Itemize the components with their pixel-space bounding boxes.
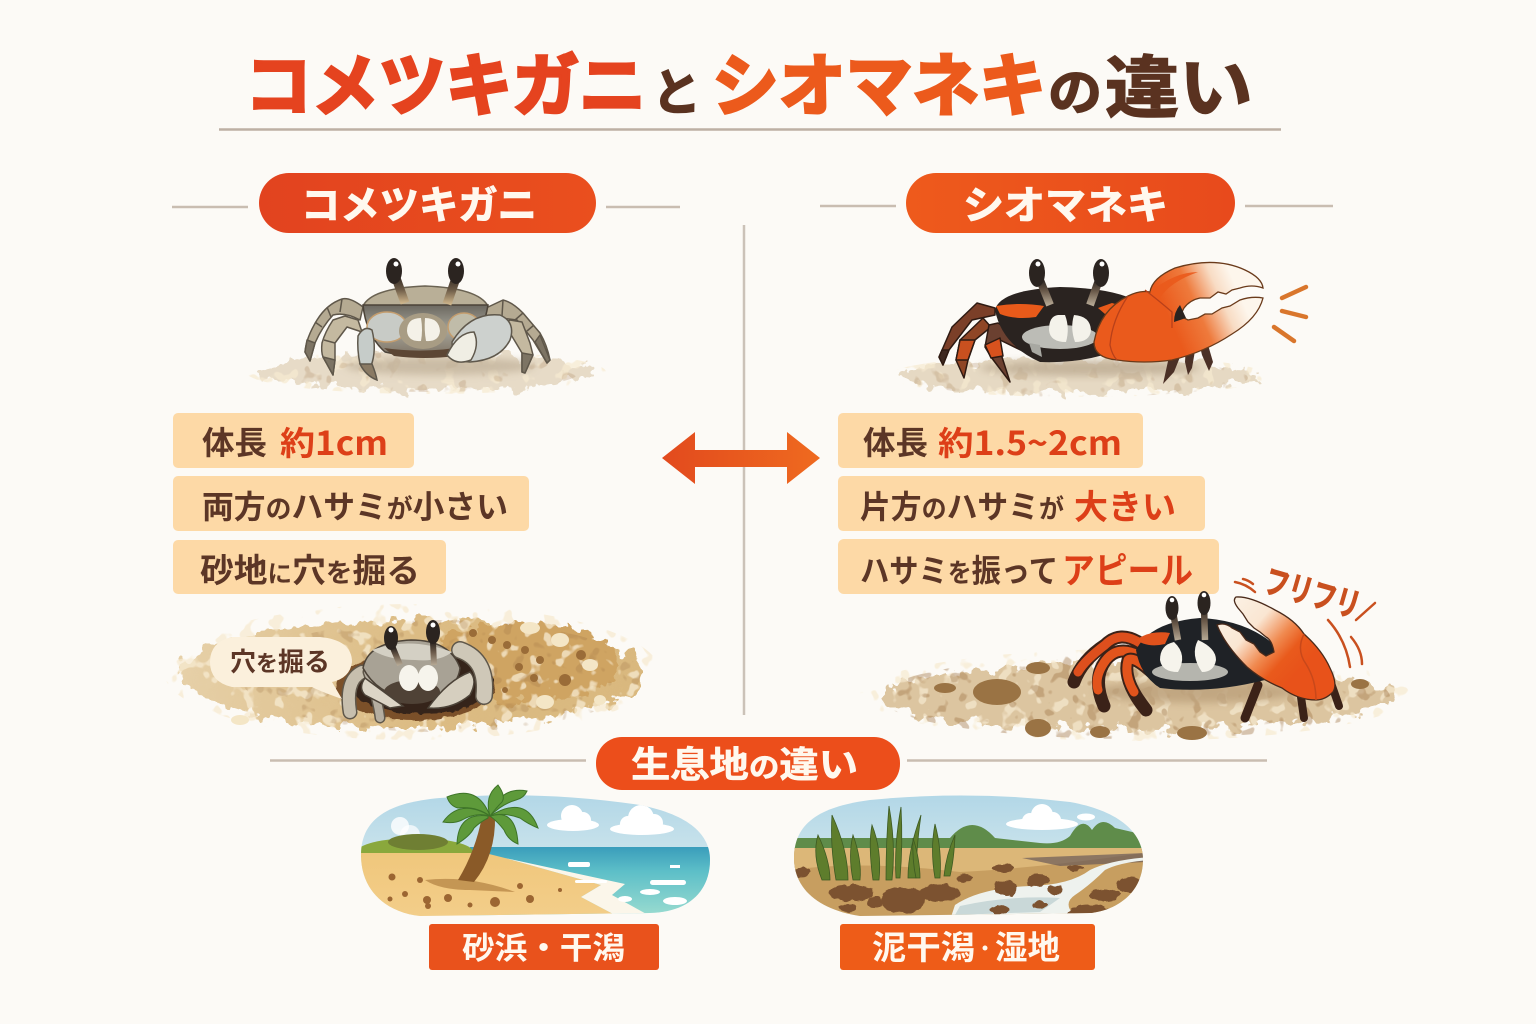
- water: [952, 858, 1143, 915]
- title: [245, 49, 1253, 127]
- label: 泥干潟・湿地: 湿地: [995, 929, 1060, 966]
- info box: waves claw: アピール: [1062, 550, 1193, 591]
- info box: one claw large: [838, 476, 1205, 531]
- info box: both claws small: [173, 476, 529, 531]
- info box: waves claw: ハサミを振って: [860, 553, 1058, 589]
- palm tree: [443, 785, 538, 882]
- text: フリフリ: フリフリ: [1260, 562, 1364, 625]
- eyes: [1166, 591, 1210, 640]
- eye stalks: [386, 258, 464, 304]
- left legs: [939, 303, 1036, 382]
- info box: body length right: 体長: [863, 425, 928, 461]
- carapace: [363, 286, 488, 306]
- info box: body length right: [838, 413, 1143, 468]
- motion lines: [1274, 287, 1306, 341]
- legs: [1074, 637, 1339, 718]
- crab: シオマネキ (orange claw): [939, 259, 1306, 384]
- info box: one claw large: 大きい: [1074, 489, 1176, 527]
- title: の: [1048, 65, 1102, 121]
- mouth: [399, 665, 438, 691]
- info box: body length left: 体長: [202, 425, 267, 461]
- label: 砂浜・干潟: 砂浜・干潟: [462, 931, 625, 966]
- motion lines: waving: [1235, 579, 1375, 667]
- landscape: mud flat and wetland: [794, 796, 1143, 916]
- title: コメツキガニ: [245, 49, 646, 125]
- small claws: [358, 315, 512, 380]
- title: と: [652, 65, 701, 121]
- eyes: [384, 620, 440, 665]
- title: シオマネキ: [712, 49, 1046, 125]
- speech bubble: 穴を掘る: [210, 637, 352, 699]
- infographic canvas: [166, 50, 1408, 970]
- heading pill: コメツキガニ: コメツキガニ: [301, 185, 537, 228]
- big claw: [1094, 262, 1263, 362]
- mouth: [1160, 640, 1216, 672]
- mud lumps: [795, 863, 1140, 914]
- info box: digs holes: [173, 540, 446, 594]
- label: 泥干潟・湿地: [840, 924, 1095, 970]
- heading pill: コメツキガニ: [259, 173, 596, 233]
- info box: one claw large: 片方のハサミが: [860, 489, 1064, 525]
- mouth: [399, 313, 447, 349]
- title: 違い: [1105, 51, 1253, 127]
- back legs: [1163, 338, 1213, 384]
- double-headed arrow: [662, 432, 820, 484]
- ground with burrow: [164, 604, 660, 740]
- label: 泥干潟・湿地: 泥干潟: [872, 929, 975, 966]
- heading pill: シオマネキ: [906, 173, 1235, 233]
- info box: body length left: 約1cm: [280, 417, 388, 465]
- info box: body length left: [173, 413, 414, 468]
- carapace: [995, 287, 1135, 362]
- heading pill: シオマネキ: シオマネキ: [963, 185, 1168, 228]
- info box: both claws small: 両方のハサミが小さい: [202, 489, 508, 525]
- raised claw: [1217, 597, 1335, 700]
- mouth: [1049, 315, 1068, 342]
- speech bubble: 穴を掘る: 穴を掘る: [230, 647, 330, 677]
- left legs: [305, 299, 363, 375]
- right legs: [486, 300, 550, 373]
- info box: digs holes: 砂地に穴を掘る: [200, 552, 420, 589]
- landscape: sandy beach: [355, 785, 715, 920]
- info box: waves claw: [838, 539, 1219, 594]
- crab: シオマネキ waving claw: [1074, 591, 1339, 718]
- legs: [349, 650, 484, 718]
- eye stalks: [1029, 259, 1109, 305]
- ground under grey crab: [246, 350, 606, 394]
- heading pill: 生息地の違い: [596, 737, 900, 790]
- ground under orange crab: [888, 355, 1268, 397]
- hills: [790, 822, 1145, 850]
- carapace: [1136, 618, 1280, 690]
- clouds: [391, 805, 674, 836]
- crab: コメツキガニ (grey): [305, 258, 550, 380]
- heading pill: 生息地の違い: 生息地 の違い: [631, 744, 858, 785]
- crab: digging: [349, 620, 484, 718]
- info box: body length right: 約1.5~2cm: [938, 417, 1122, 465]
- claws: [362, 672, 474, 708]
- grass: [816, 806, 955, 880]
- ground under waving crab: [860, 649, 1410, 741]
- label: 砂浜・干潟: [429, 924, 659, 970]
